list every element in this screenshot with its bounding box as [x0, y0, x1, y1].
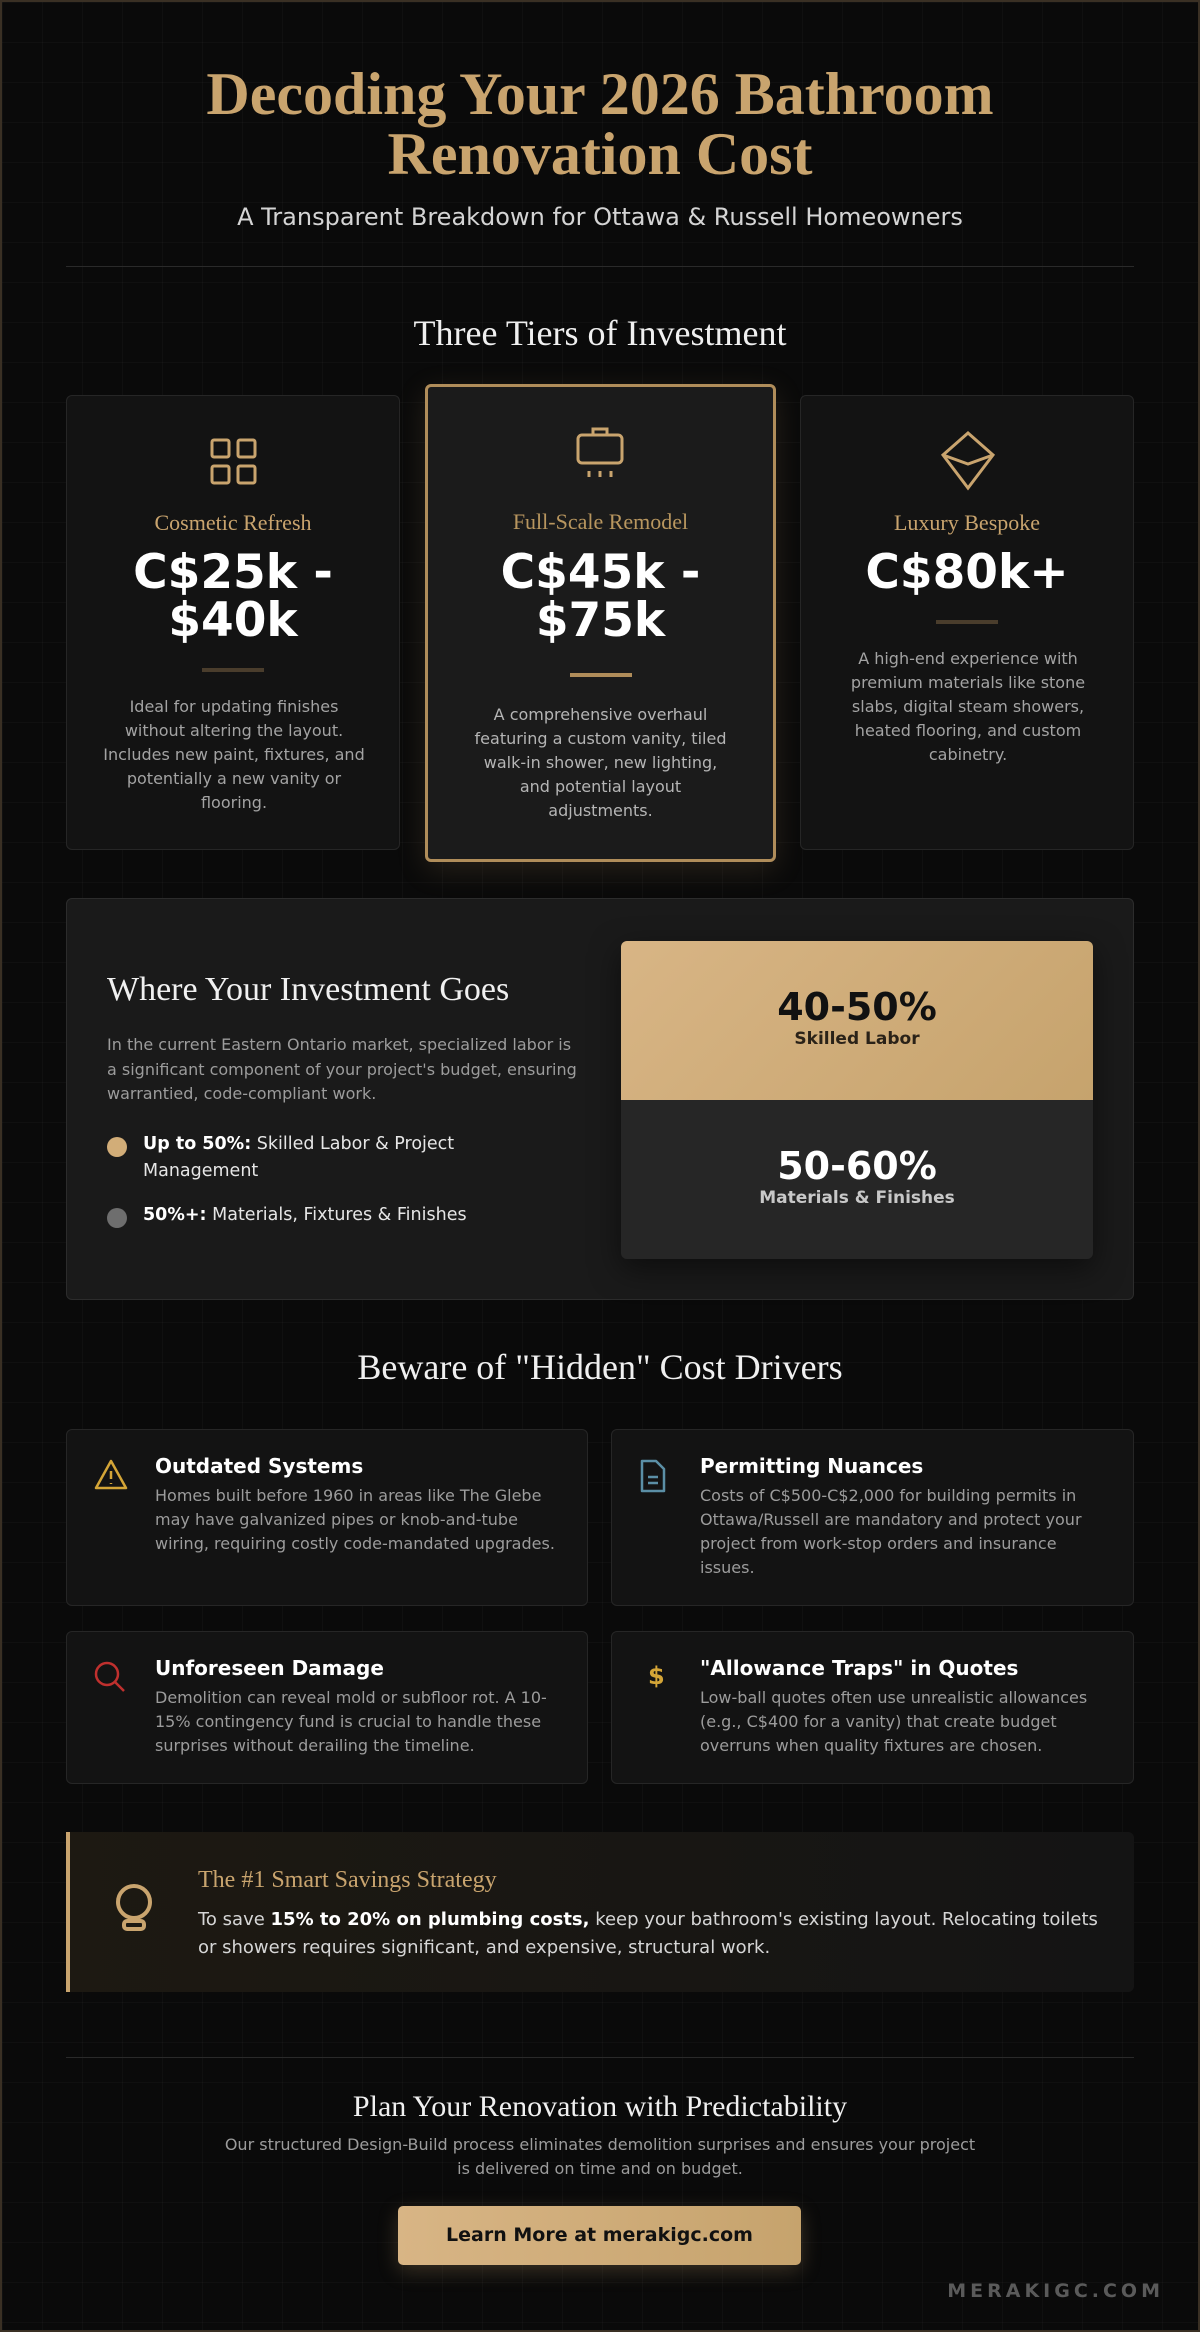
bullet: labor: Up to 50%: Skilled Labor & Project Management	[143, 1134, 454, 1181]
callout heading: The #1 Smart Savings Strategy	[198, 1867, 497, 1893]
card: allowance traps	[611, 1631, 1134, 1784]
segment: materials: 50-60%	[777, 1144, 937, 1188]
card: outdated systems: Homes built before 1960 in areas like The Glebe may have galvanized pipes or knob-and-tube wiring, requiring costly code-mandated upgrades.	[155, 1486, 555, 1553]
callout: savings strategy	[66, 1832, 1134, 1992]
card: permitting nuances: Costs of C$500-C$2,000 for building permits in Ottawa/Russell are mandatory and protect your project from work-stop orders and insurance issues.	[700, 1486, 1082, 1577]
chart: cost split	[621, 941, 1093, 1259]
panel: full-scale remodel	[425, 384, 776, 862]
tier name: Full-Scale Remodel	[513, 509, 688, 534]
tier name: Luxury Bespoke	[894, 510, 1040, 535]
panel: cosmetic refresh	[66, 395, 400, 850]
description: Ideal for updating finishes without altering the layout. Includes new paint, fixtures, and potentially a new vanity or flooring.	[103, 697, 365, 812]
card: unforeseen damage: Unforeseen Damage	[155, 1656, 384, 1680]
panel: luxury bespoke	[800, 395, 1134, 850]
price: C$25k -	[133, 545, 333, 600]
tier name: Cosmetic Refresh	[154, 510, 312, 535]
footer brand: MERAKIGC.COM	[947, 2280, 1164, 2302]
callout text: To save 15% to 20% on plumbing costs, keep your bathroom's existing layout. Relocating toilets or showers requires significant, and expensive, structural work.	[198, 1909, 1098, 1958]
description: A high-end experience with premium materials like stone slabs, digital steam showers, heated flooring, and custom cabinetry.	[851, 649, 1085, 764]
icon: dollar: $	[648, 1662, 665, 1690]
heading: plan your renovation: Plan Your Renovation with Predictability	[353, 2090, 847, 2123]
segment: labor	[621, 941, 1093, 1100]
card: outdated systems: Outdated Systems	[155, 1454, 363, 1478]
title	[206, 61, 994, 187]
segment: materials: Materials & Finishes	[759, 1188, 955, 1208]
heading: Where Your Investment Goes	[107, 971, 509, 1008]
subtitle: A Transparent Breakdown for Ottawa & Russell Homeowners	[237, 203, 963, 231]
icon: shower	[576, 428, 624, 477]
card: allowance traps: Low-ball quotes often use unrealistic allowances (e.g., C$400 for a vanity) that create budget overruns when quality fixtures are chosen.	[700, 1688, 1087, 1755]
segment: labor: Skilled Labor	[794, 1029, 920, 1049]
icon: lightbulb	[116, 1884, 152, 1931]
text: closing: Our structured Design-Build process eliminates demolition surprises and ensures your project is delivered on time and on budget.	[225, 2135, 975, 2178]
icon: warning	[94, 1460, 128, 1490]
description: A comprehensive overhaul featuring a custom vanity, tiled walk-in shower, new lighting, and potential layout adjustments.	[475, 705, 726, 820]
card: permitting nuances: Permitting Nuances	[700, 1454, 923, 1478]
price	[501, 545, 700, 648]
button: Learn More at merakigc.com	[446, 2224, 753, 2246]
price: C$45k -	[501, 545, 700, 600]
icon: diamond	[941, 431, 995, 490]
button	[398, 2206, 801, 2265]
title: Decoding Your 2026 Bathroom	[206, 61, 994, 127]
card: outdated systems	[66, 1429, 588, 1606]
card: permitting nuances	[611, 1429, 1134, 1606]
segment: materials	[621, 1100, 1093, 1259]
price: C$80k+	[865, 545, 1069, 600]
heading: three tiers: Three Tiers of Investment	[414, 313, 786, 353]
card: allowance traps: "Allowance Traps" in Quotes	[700, 1656, 1018, 1680]
card: unforeseen damage: Demolition can reveal mold or subfloor rot. A 10-15% contingency fund is crucial to handle these surprises without derailing the timeline.	[155, 1688, 547, 1755]
segment: labor: 40-50%	[777, 985, 937, 1029]
price: $40k	[168, 593, 298, 648]
card: unforeseen damage	[66, 1631, 588, 1784]
icon: grid	[210, 438, 256, 484]
title: Renovation Cost	[387, 121, 812, 187]
paragraph: In the current Eastern Ontario market, specialized labor is a significant component of your project's budget, ensuring warrantied, code-compliant work.	[107, 1035, 577, 1103]
panel: where your investment goes	[66, 898, 1134, 1300]
icon: magnifier	[94, 1662, 125, 1692]
price: $75k	[536, 593, 665, 648]
heading: hidden cost drivers: Beware of "Hidden" Cost Drivers	[357, 1347, 843, 1387]
bullet: materials: 50%+: Materials, Fixtures & Finishes	[143, 1205, 467, 1225]
icon: document	[640, 1460, 666, 1492]
price	[133, 545, 333, 648]
